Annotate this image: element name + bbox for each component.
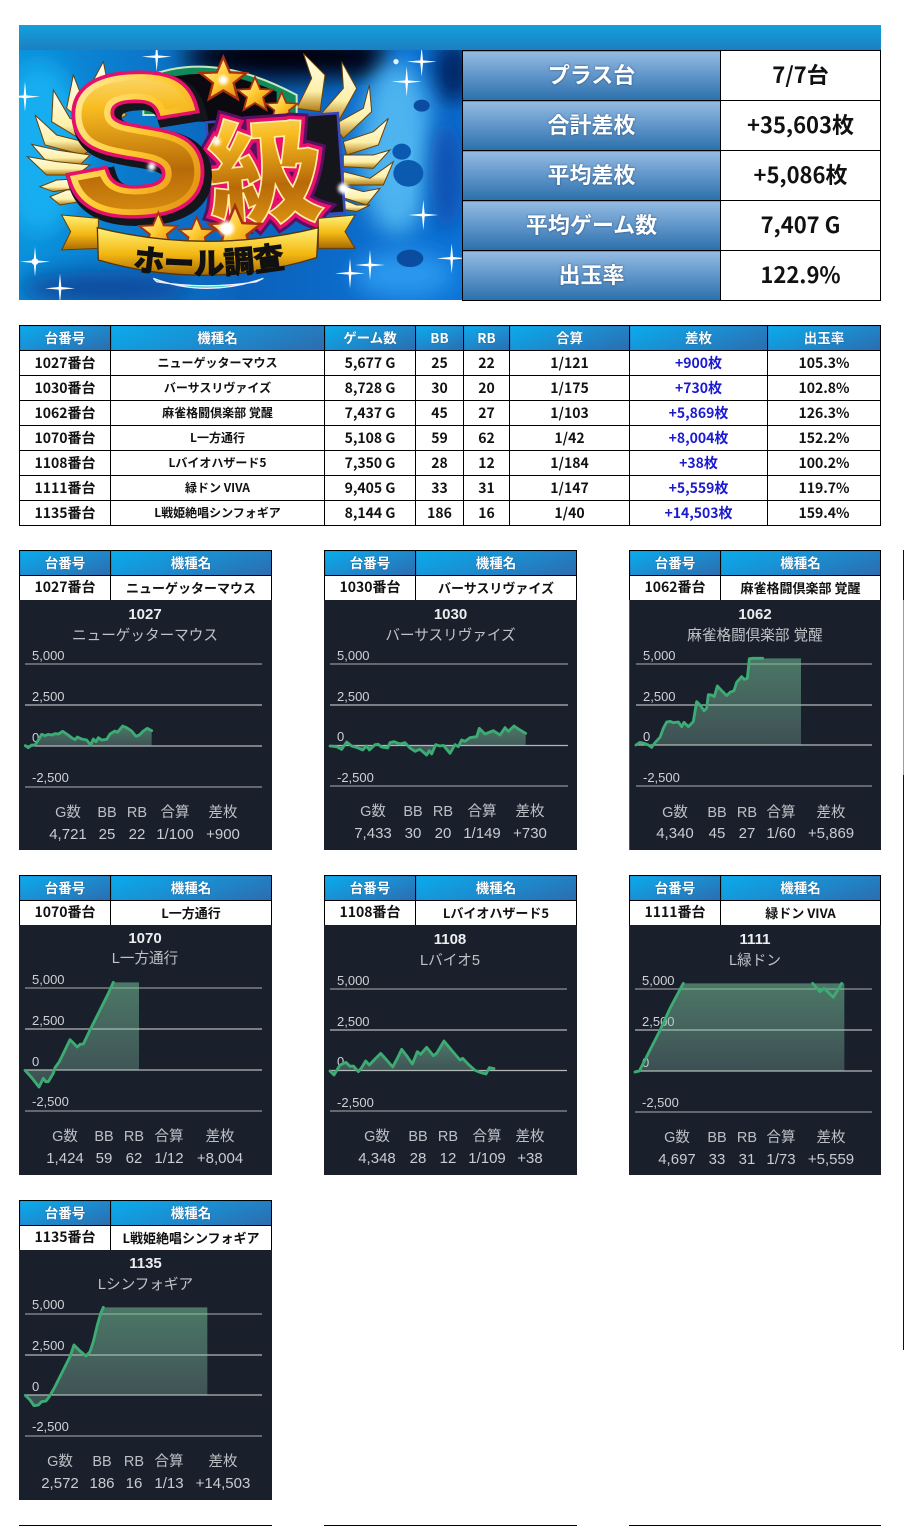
line chart 1027: -2,500 (32, 770, 69, 785)
machine results table: 100.2% (798, 453, 850, 473)
machine results table: 105.3% (798, 353, 850, 373)
ribbon (60, 214, 356, 289)
line chart 1111: 2,500 (642, 1014, 675, 1029)
machine results table: 麻雀格闘倶楽部 覚醒 (162, 404, 273, 421)
line chart 1030: 2,500 (337, 689, 370, 704)
chart title 1027 (72, 606, 218, 644)
stats row 1135: 186 (89, 1475, 115, 1492)
machine results table: 31 (478, 478, 495, 498)
machine results table: +5,869枚 (669, 403, 728, 423)
lens flares (148, 75, 349, 236)
card header: 1135番台 (34, 1227, 96, 1247)
machine results table: 9,405 G (345, 478, 395, 498)
stats row 1062: 1/60 (766, 825, 796, 842)
stats row 1111: 33 (709, 1151, 725, 1168)
line chart 1062 (636, 648, 872, 786)
chart title 1062: 1062 (738, 606, 772, 623)
line chart 1062: -2,500 (643, 770, 680, 785)
stats row 1135: G数 (47, 1453, 73, 1470)
machine results table: バーサスリヴァイズ (164, 379, 271, 396)
card header (629, 550, 881, 600)
summary stats table: 平均差枚 (547, 158, 636, 190)
panel: machine 1062 (629, 550, 881, 850)
summary stats table (462, 50, 881, 301)
line chart 1111: 0 (642, 1055, 649, 1070)
stats row 1070: 59 (96, 1150, 112, 1167)
stats row 1027: 1/100 (156, 826, 194, 843)
line chart 1135 (25, 1297, 262, 1436)
machine results table: +38枚 (679, 453, 718, 473)
stats row 1135: 1/13 (154, 1475, 184, 1492)
chart panel 1027 (19, 600, 272, 850)
machine results table: L戦姫絶唱シンフォギア (154, 504, 281, 521)
chart title 1135: Lシンフォギア (98, 1276, 193, 1293)
chart title 1111: 1111 (740, 931, 770, 948)
chart title 1030: 1030 (434, 606, 467, 623)
stats row 1030: G数 (360, 803, 386, 820)
line chart 1108 (330, 973, 567, 1111)
stats row 1070 (46, 1128, 243, 1167)
machine results table: 25 (431, 353, 448, 373)
chart title 1030: バーサスリヴァイズ (385, 627, 516, 644)
stats row 1062: BB (707, 805, 727, 821)
stats row 1030: 差枚 (516, 803, 545, 820)
line chart 1135: 0 (32, 1379, 39, 1394)
card header: 1108番台 (339, 902, 401, 922)
card header: バーサスリヴァイズ (438, 578, 554, 597)
machine results table: 159.4% (798, 503, 850, 523)
machine results table: 33 (431, 478, 448, 498)
machine results table: +730枚 (675, 378, 722, 398)
machine results table: 差枚 (685, 327, 712, 347)
stats row 1070: G数 (52, 1128, 78, 1145)
stats row 1070: RB (124, 1129, 144, 1145)
line chart 1030: 0 (337, 729, 344, 744)
machine results table: BB (430, 327, 449, 347)
machine results table: 28 (431, 453, 448, 473)
stats row 1111: 31 (739, 1151, 755, 1168)
card header: 台番号 (350, 552, 390, 572)
panel: machine 1070 (19, 875, 272, 1175)
line chart 1135: -2,500 (32, 1419, 69, 1434)
machine results table: 22 (478, 353, 495, 373)
card header: 1070番台 (34, 902, 96, 922)
card header: 機種名 (780, 552, 821, 572)
stats row 1135: 2,572 (41, 1475, 79, 1492)
line chart 1030 (330, 648, 568, 786)
machine results table: 1108番台 (34, 453, 96, 473)
card header: L一方通行 (161, 903, 221, 922)
line chart 1062: 0 (643, 729, 650, 744)
stats row 1135: 16 (126, 1475, 142, 1492)
panel: machine 1027 (19, 550, 272, 850)
machine results table: 台番号 (45, 327, 85, 347)
stats row 1135: BB (92, 1454, 112, 1470)
line chart 1111: 5,000 (642, 973, 675, 988)
stats row 1111: +5,559 (808, 1151, 854, 1168)
card header: 緑ドン VIVA (765, 903, 836, 922)
line chart 1030: 5,000 (337, 648, 370, 663)
stats row 1030: 7,433 (354, 825, 392, 842)
machine results table: 1/147 (550, 478, 589, 498)
stats row 1027: BB (97, 805, 117, 821)
machine results table: 59 (431, 428, 448, 448)
sparkles (10, 42, 467, 303)
panel: machine 1135 (19, 1200, 272, 1500)
card header: 機種名 (476, 552, 516, 572)
stats row 1027: 合算 (160, 804, 190, 821)
upper stars (200, 57, 298, 122)
top banner bar (19, 25, 881, 50)
stats row 1027: +900 (206, 826, 240, 843)
stats row 1030: 1/149 (463, 825, 501, 842)
stats row 1111: 1/73 (766, 1151, 796, 1168)
line chart 1111: -2,500 (642, 1095, 679, 1110)
panel: machine 1111 (629, 875, 881, 1175)
stats row 1030 (354, 803, 547, 842)
card header: 1030番台 (339, 577, 401, 597)
chart panel 1135 (19, 1250, 272, 1500)
machine results table: 30 (431, 378, 448, 398)
chart panel 1030 (324, 600, 577, 850)
machine results table: 16 (478, 503, 495, 523)
stats row 1030: 30 (405, 825, 421, 842)
line chart 1108: -2,500 (337, 1095, 374, 1110)
card header: 台番号 (45, 1202, 85, 1222)
green ring (143, 67, 297, 122)
machine results table: 1/175 (550, 378, 589, 398)
machine results table: 1/121 (550, 353, 589, 373)
machine results table: 5,677 G (345, 353, 395, 373)
card header (19, 1200, 272, 1250)
chart panel 1108 (324, 925, 577, 1175)
chart title 1070 (112, 930, 178, 967)
chart title 1062 (687, 606, 823, 644)
line chart 1030: -2,500 (337, 770, 374, 785)
card header: 台番号 (350, 877, 390, 897)
machine results table: 出玉率 (804, 327, 844, 347)
card header: 台番号 (655, 552, 695, 572)
line chart 1070: 2,500 (32, 1013, 65, 1028)
chart panel 1070 (19, 925, 272, 1175)
stats row 1108 (358, 1128, 545, 1167)
machine results table: +900枚 (675, 353, 722, 373)
machine results table: 5,108 G (345, 428, 395, 448)
line chart 1111 (635, 973, 872, 1112)
chart title 1030 (385, 606, 516, 644)
machine results table: 1111番台 (34, 478, 96, 498)
stats row 1070: 1/12 (154, 1150, 184, 1167)
card header (324, 875, 577, 925)
stats row 1108: G数 (364, 1128, 390, 1145)
chart title 1135: 1135 (129, 1255, 162, 1272)
machine results table: 1062番台 (34, 403, 96, 423)
summary stats table: プラス台 (548, 58, 635, 90)
machine results table: +5,559枚 (669, 478, 728, 498)
chart title 1070: 1070 (128, 930, 162, 947)
stats row 1070: 合算 (154, 1128, 184, 1145)
chart title 1070: L一方通行 (112, 950, 178, 967)
stats row 1062: 差枚 (816, 804, 846, 821)
machine results table: 102.8% (798, 378, 850, 398)
machine results table: 8,144 G (345, 503, 395, 523)
panel: machine 1108 (324, 875, 577, 1175)
machine results table: 27 (478, 403, 495, 423)
line chart 1135: 5,000 (32, 1297, 65, 1312)
machine results table: Lバイオハザード5 (168, 454, 267, 471)
chart title 1027: 1027 (128, 606, 162, 623)
stats row 1062 (656, 804, 854, 842)
summary stats table: 122.9% (760, 258, 841, 290)
emblem: 級: 級 (201, 79, 328, 252)
card header: 台番号 (45, 552, 85, 572)
line chart 1070: 5,000 (32, 972, 65, 987)
machine results table: 7,350 G (345, 453, 395, 473)
stats row 1062: 4,340 (656, 825, 694, 842)
stats row 1108: 差枚 (516, 1128, 545, 1145)
machine results table: 機種名 (197, 327, 238, 347)
line chart 1062: 5,000 (643, 648, 676, 663)
machine results table: 1/42 (554, 428, 585, 448)
card header: Lバイオハザード5 (443, 903, 549, 922)
chart panel 1062 (629, 600, 881, 850)
chart title 1108: 1108 (434, 931, 466, 948)
stats row 1030: 20 (435, 825, 451, 842)
summary stats table: 出玉率 (558, 258, 624, 290)
stats row 1027: 差枚 (208, 804, 238, 821)
card header: 機種名 (476, 877, 516, 897)
stats row 1111: 差枚 (816, 1129, 846, 1146)
wings (27, 53, 393, 212)
machine results table: 152.2% (798, 428, 850, 448)
chart title 1027: ニューゲッターマウス (72, 627, 218, 644)
machine results table: ゲーム数 (343, 327, 397, 347)
chart title 1108: Lバイオ5 (420, 953, 480, 969)
card header: 1062番台 (644, 577, 706, 597)
card header: 機種名 (171, 1202, 211, 1222)
machine results table: 7,437 G (345, 403, 395, 423)
machine results table: 緑ドン VIVA (185, 479, 250, 496)
card header: 機種名 (171, 877, 211, 897)
stats row 1027: 4,721 (49, 826, 87, 843)
stats row 1070: 1,424 (46, 1150, 84, 1167)
summary stats table: 7/7台 (772, 58, 829, 90)
machine results table: 45 (431, 403, 448, 423)
card header (19, 550, 272, 600)
chart panel 1111 (629, 925, 881, 1175)
machine results table: 126.3% (798, 403, 850, 423)
stats row 1111: G数 (664, 1129, 690, 1146)
machine results table: 119.7% (798, 478, 850, 498)
line chart 1062: 2,500 (643, 689, 676, 704)
card header (19, 875, 272, 925)
line chart 1027 (25, 648, 262, 787)
summary stats table: +5,086枚 (753, 158, 848, 190)
stats row 1062: G数 (662, 804, 688, 821)
chart title 1111 (729, 931, 781, 969)
machine results table: 8,728 G (345, 378, 395, 398)
stats row 1070: 62 (126, 1150, 142, 1167)
machine results table: 1/40 (554, 503, 585, 523)
summary stats table: +35,603枚 (747, 108, 854, 140)
emblem: 級: 級 (201, 79, 328, 252)
panel: machine 1030 (324, 550, 577, 850)
line chart 1108: 0 (337, 1054, 344, 1069)
stats row 1030: 合算 (468, 803, 496, 820)
card header: 1027番台 (34, 577, 96, 597)
stats row 1027: 22 (129, 826, 145, 843)
background (0, 33, 473, 305)
stats row 1070: 差枚 (206, 1128, 235, 1145)
card header (629, 875, 881, 925)
stats row 1135: 合算 (154, 1453, 184, 1470)
stats row 1135: +14,503 (196, 1475, 250, 1492)
stats row 1108: BB (408, 1129, 428, 1145)
summary stats table: 合計差枚 (547, 108, 636, 140)
stats row 1108: 4,348 (358, 1150, 396, 1167)
stats row 1108: RB (438, 1129, 458, 1145)
stats row 1108: +38 (517, 1150, 543, 1167)
chart title 1108 (420, 931, 480, 969)
stats row 1108: 合算 (472, 1128, 502, 1145)
machine results table: 1030番台 (34, 378, 96, 398)
stats row 1070: BB (94, 1129, 114, 1145)
stats row 1062: 45 (709, 825, 725, 842)
card header: ニューゲッターマウス (126, 578, 256, 597)
stats row 1062: 合算 (766, 804, 796, 821)
stats row 1070: +8,004 (197, 1150, 243, 1167)
lower stars (139, 206, 261, 253)
line chart 1027: 0 (32, 730, 39, 745)
machine results table: +8,004枚 (669, 428, 728, 448)
line chart 1135: 2,500 (32, 1338, 65, 1353)
card header: 機種名 (171, 552, 211, 572)
stats row 1111: 合算 (766, 1129, 796, 1146)
machine results table: +14,503枚 (664, 503, 733, 523)
ribbon: ホール調査 (134, 242, 285, 277)
emblem: 級: 級 (201, 79, 328, 252)
machine results table: 1070番台 (34, 428, 96, 448)
line chart 1108: 2,500 (337, 1014, 370, 1029)
chart title 1135 (98, 1255, 193, 1293)
line chart 1070 (25, 972, 262, 1111)
stats row 1111: RB (737, 1130, 757, 1146)
stats row 1062: 27 (739, 825, 755, 842)
stats row 1111: BB (707, 1130, 727, 1146)
stats row 1135: 差枚 (208, 1453, 238, 1470)
card header: L戦姫絶唱シンフォギア (122, 1228, 260, 1247)
stats row 1108: 12 (440, 1150, 456, 1167)
machine results table: 1027番台 (34, 353, 96, 373)
hero image: S級 ホール調査 emblem (19, 50, 462, 300)
card header: 台番号 (655, 877, 695, 897)
stats row 1111: 4,697 (658, 1151, 696, 1168)
stats row 1027: 25 (99, 826, 115, 843)
machine results table: 1/184 (550, 453, 589, 473)
line chart 1027: 5,000 (32, 648, 65, 663)
machine results table: 合算 (556, 327, 583, 347)
line chart 1027: 2,500 (32, 689, 65, 704)
stats row 1108: 28 (410, 1150, 426, 1167)
stats row 1030: +730 (513, 825, 547, 842)
machine results table: 20 (478, 378, 495, 398)
card header: 機種名 (780, 877, 821, 897)
stats row 1111 (658, 1129, 854, 1168)
card header: 1111番台 (644, 902, 706, 922)
card header: 麻雀格闘倶楽部 覚醒 (741, 578, 860, 597)
stats row 1135 (41, 1453, 250, 1492)
stats row 1030: RB (433, 804, 453, 820)
stats row 1027: RB (127, 805, 147, 821)
stats row 1027 (49, 804, 240, 843)
summary stats table: 平均ゲーム数 (526, 208, 657, 240)
machine results table: 1135番台 (34, 503, 96, 523)
machine results table: 1/103 (550, 403, 589, 423)
machine results table: 62 (478, 428, 495, 448)
line chart 1070: 0 (32, 1054, 39, 1069)
stats row 1062: +5,869 (808, 825, 854, 842)
card header (324, 550, 577, 600)
stats row 1030: BB (403, 804, 423, 820)
card header: 台番号 (45, 877, 85, 897)
machine results table: ニューゲッターマウス (157, 354, 278, 371)
machine results table: L一方通行 (190, 429, 245, 446)
chart title 1111: L緑ドン (729, 952, 781, 969)
stats row 1135: RB (124, 1454, 144, 1470)
chart title 1062: 麻雀格闘倶楽部 覚醒 (687, 627, 823, 644)
summary stats table: 7,407 G (761, 208, 840, 240)
machine results table: RB (477, 327, 496, 347)
machine results table: 12 (478, 453, 495, 473)
machine results table (19, 325, 881, 526)
stats row 1062: RB (737, 805, 757, 821)
stats row 1027: G数 (55, 804, 81, 821)
stats row 1108: 1/109 (468, 1150, 506, 1167)
line chart 1108: 5,000 (337, 973, 370, 988)
machine results table: 186 (427, 503, 452, 523)
line chart 1070: -2,500 (32, 1094, 69, 1109)
